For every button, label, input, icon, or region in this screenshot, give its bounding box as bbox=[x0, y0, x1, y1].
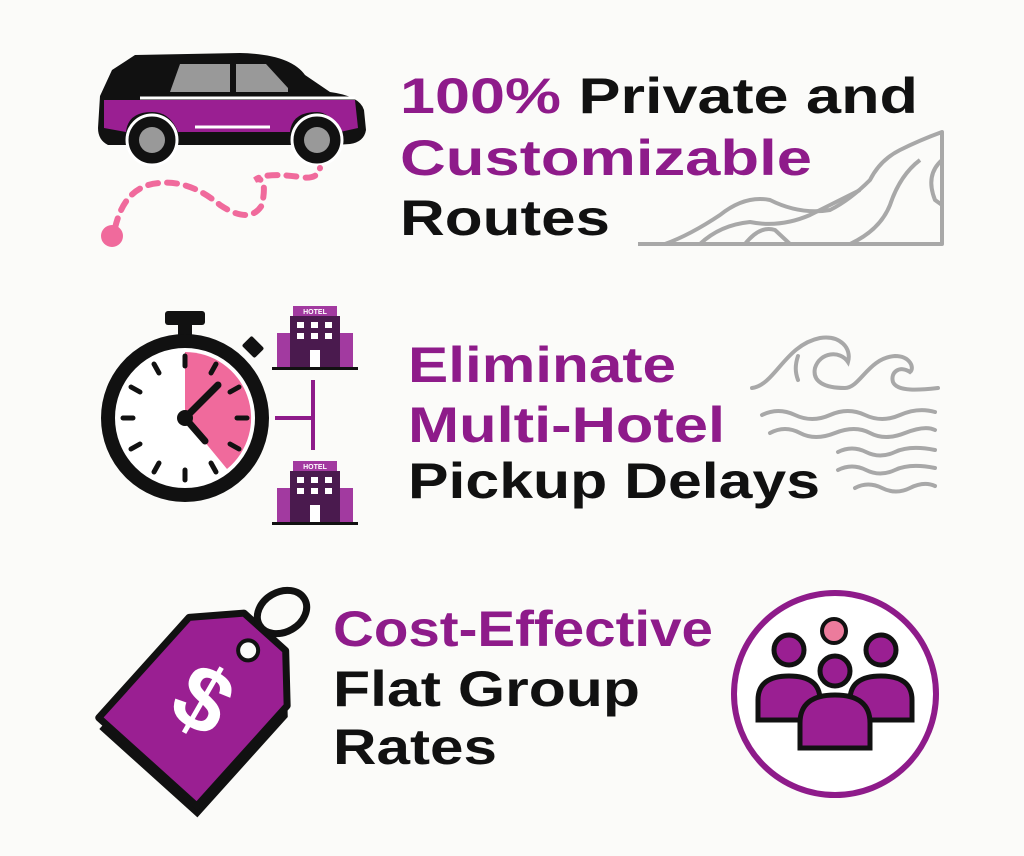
icon: car bbox=[98, 53, 366, 165]
icon: mountains bbox=[638, 132, 942, 244]
heading: group rates: Rates bbox=[333, 719, 497, 775]
icon: price tag: $ bbox=[155, 643, 250, 757]
icon: hotels connector: HOTEL bbox=[303, 464, 328, 471]
heading: group rates: Flat Group bbox=[333, 661, 640, 717]
heading: private routes: Customizable bbox=[400, 130, 812, 186]
heading: multi-hotel: Eliminate bbox=[408, 337, 676, 393]
heading: private routes: 100% Private and bbox=[400, 68, 918, 124]
heading: multi-hotel bbox=[408, 337, 820, 509]
heading: multi-hotel: Pickup Delays bbox=[408, 453, 820, 509]
icon: group of people bbox=[734, 593, 936, 795]
icon: price tag bbox=[93, 582, 320, 817]
heading: group rates bbox=[333, 601, 713, 775]
heading: multi-hotel: Multi-Hotel bbox=[408, 397, 725, 453]
icon: stopwatch bbox=[108, 311, 264, 495]
heading: private routes bbox=[400, 68, 918, 246]
heading: group rates: Cost-Effective bbox=[333, 601, 713, 657]
icon: dashed route bbox=[101, 168, 320, 247]
icon: hotels connector bbox=[272, 306, 358, 525]
icon: waves bbox=[752, 338, 938, 492]
icon: hotels connector: HOTEL bbox=[303, 309, 328, 316]
heading: private routes: Routes bbox=[400, 190, 610, 246]
